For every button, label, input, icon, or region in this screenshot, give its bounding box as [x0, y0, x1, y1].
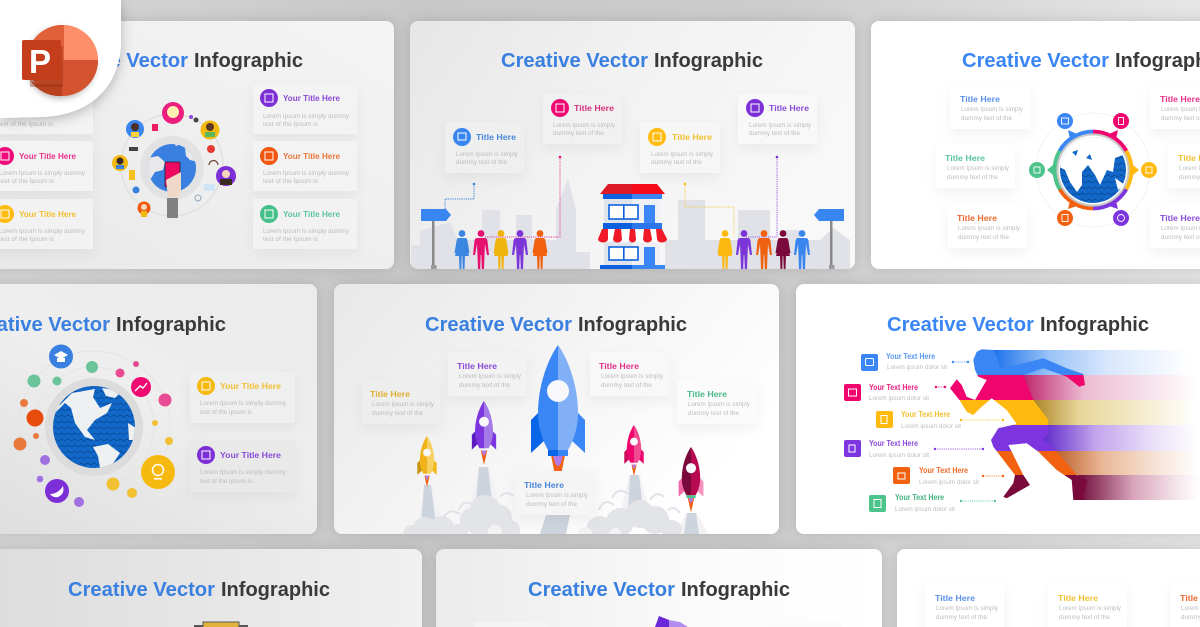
panel: bottom middle infographic — [436, 549, 882, 627]
dotted connectors — [445, 156, 778, 237]
card: purple: dummy text of the — [749, 131, 801, 137]
panel: runner infographic — [796, 284, 1200, 534]
card: pink left — [0, 141, 93, 191]
row: green: Your Text Here — [895, 493, 944, 502]
people group right — [718, 230, 810, 269]
card: green right — [253, 199, 357, 249]
title — [528, 579, 790, 601]
card: yellow: Lorem Ipsum is simply — [1059, 606, 1121, 612]
rocket: pink — [624, 425, 644, 476]
card: blue: dummy text of the — [456, 160, 508, 166]
title — [68, 579, 330, 601]
icon: PowerPoint logo: P — [29, 43, 51, 80]
card: orange right: Your Title Here — [283, 152, 341, 161]
row: orange — [893, 466, 1004, 486]
card: purple — [1150, 204, 1200, 248]
card: left stub — [474, 622, 550, 627]
card: pink: Lorem Ipsum is simply — [601, 374, 663, 380]
card: purple — [190, 441, 295, 492]
card: purple: Lorem Ipsum is simply dummy — [200, 470, 286, 476]
speed bands — [985, 350, 1200, 500]
panel: earth orbit infographic — [0, 284, 317, 534]
title — [887, 314, 1149, 336]
card: pink — [543, 94, 622, 144]
card: blue: Title Here — [476, 133, 517, 142]
card: orange — [1171, 583, 1200, 627]
card: right stub — [763, 622, 842, 627]
card: purple: text of the Ipsum is — [200, 479, 252, 485]
title: Infographic — [1040, 314, 1149, 336]
title: Infographic — [681, 579, 790, 601]
row: orange: Your Text Here — [919, 466, 968, 475]
card: yellow: dummy text of the — [1059, 615, 1111, 621]
card: pink: Title Here — [1160, 95, 1200, 104]
card: blue — [950, 85, 1030, 129]
card: purple: Title Here — [1160, 214, 1200, 223]
card: orange: Title Here — [957, 214, 998, 223]
row: blue — [861, 352, 969, 371]
card: purple: Title Here — [457, 362, 498, 371]
card: blue — [516, 471, 595, 515]
card: blue: dummy text of the — [961, 116, 1013, 122]
card: blue: Title Here — [960, 95, 1001, 104]
title: Creative Vector — [425, 314, 572, 336]
row: blue: Lorem ipsum dolor sit — [887, 365, 947, 371]
card: yellow — [640, 122, 720, 173]
title — [0, 314, 226, 336]
title: Infographic — [654, 50, 763, 72]
card: pink: Lorem Ipsum is simply — [553, 123, 615, 129]
card: blue — [445, 122, 524, 173]
title — [501, 50, 763, 72]
smoke clouds and exhaust trails — [403, 467, 708, 534]
card: top left — [0, 84, 93, 134]
rocket: purple — [472, 401, 496, 465]
card: yellow: dummy text of the — [651, 160, 703, 166]
panel: shop and people infographic — [410, 21, 855, 269]
row: blue: Your Text Here — [886, 352, 935, 361]
shop building — [598, 184, 667, 269]
card: blue: Lorem Ipsum is simply — [961, 107, 1023, 113]
panel: bottom right infographic — [897, 549, 1200, 627]
card: pink — [590, 352, 669, 396]
signpost left — [421, 209, 451, 269]
title — [41, 50, 303, 72]
row: yellow — [876, 410, 1004, 430]
card: yellow: Title Here — [1058, 594, 1099, 603]
card: purple: Your Title Here — [220, 451, 282, 460]
card: pink: dummy text of the — [553, 131, 605, 137]
card: purple right — [253, 84, 357, 134]
row: purple: Your Text Here — [869, 439, 918, 448]
card: pink: Title Here — [599, 362, 640, 371]
title: Infographic — [116, 314, 226, 336]
card: blue: Lorem Ipsum is simply — [526, 493, 588, 499]
card: blue: Lorem Ipsum is simply — [456, 152, 518, 158]
title: Creative Vector — [41, 50, 188, 72]
row: green: Lorem ipsum dolor sit — [895, 507, 955, 513]
card: green — [936, 144, 1015, 188]
card: yellow — [190, 372, 295, 423]
card: orange right: Lorem Ipsum is simply dummy — [263, 171, 349, 177]
card: orange: dummy text of the — [958, 235, 1010, 241]
title: Creative Vector — [501, 50, 648, 72]
card: purple: Title Here — [769, 104, 810, 113]
city skyline — [411, 178, 850, 269]
card: yellow — [1048, 583, 1127, 627]
row: pink — [844, 383, 946, 402]
running figure — [950, 349, 1088, 500]
card: blue: Title Here — [935, 594, 976, 603]
card: purple right: Your Title Here — [283, 94, 341, 103]
card: purple — [738, 94, 817, 144]
card: yellow: Title Here — [672, 133, 713, 142]
row: pink: Your Text Here — [869, 383, 918, 392]
card: yellow left: text of the Ipsum is — [0, 237, 54, 243]
row: yellow: Lorem ipsum dolor sit — [901, 424, 961, 430]
card: blue: dummy text of the — [936, 615, 988, 621]
title: Creative Vector — [68, 579, 215, 601]
rocket: main blue — [531, 345, 585, 487]
card: pink: Title Here — [574, 104, 615, 113]
card: pink left: text of the Ipsum is — [0, 179, 54, 185]
card: blue: dummy text of the — [526, 502, 578, 508]
card: blue: Lorem Ipsum is simply — [936, 606, 998, 612]
row: green — [869, 493, 996, 513]
title — [962, 50, 1200, 72]
card: pink: dummy text of the — [601, 383, 653, 389]
card: yellow — [362, 380, 440, 424]
signpost right — [814, 209, 844, 269]
card: yellow: dummy text of the — [372, 411, 424, 417]
card: green right: text of the Ipsum is — [263, 237, 318, 243]
card: purple: Lorem Ipsum is simply — [459, 374, 521, 380]
card: green — [677, 380, 757, 424]
rocket: maroon — [679, 447, 703, 512]
card: purple — [448, 352, 527, 396]
card: purple right: Lorem Ipsum is simply dummy — [263, 114, 349, 120]
row: pink: Lorem ipsum dolor sit — [869, 396, 929, 402]
card: green: Title Here — [687, 390, 728, 399]
card: blue — [925, 583, 1004, 627]
card: yellow: Lorem Ipsum is simply dummy — [200, 401, 286, 407]
card: pink left: Your Title Here — [19, 152, 77, 161]
card: green right: Your Title Here — [283, 210, 341, 219]
card: orange right: text of the Ipsum is — [263, 179, 318, 185]
row: orange: Lorem ipsum dolor sit — [919, 480, 979, 486]
card: yellow — [1168, 144, 1200, 188]
title: Infographic — [194, 50, 303, 72]
card: yellow left — [0, 199, 93, 249]
card: yellow: Lorem Ipsum is simply — [651, 152, 713, 158]
PowerPoint badge — [0, 0, 121, 118]
card: green: Lorem Ipsum is simply — [947, 166, 1009, 172]
card: orange right — [253, 141, 357, 191]
card: blue: Title Here — [524, 481, 565, 490]
panel: people network infographic — [0, 21, 394, 269]
globe cycle diagram — [1029, 113, 1157, 227]
title: Infographic — [578, 314, 687, 336]
card: orange: Lorem Ipsum is simply — [958, 226, 1020, 232]
card: yellow: Lorem Ipsum is simply — [372, 402, 434, 408]
card: purple: dummy text of the — [459, 383, 511, 389]
globe with phone and avatars — [112, 102, 236, 218]
card: orange — [948, 204, 1027, 248]
title: Infographic — [221, 579, 330, 601]
icon: purple shape top — [655, 616, 688, 627]
card: yellow left: Your Title Here — [19, 210, 77, 219]
panel: bottom left infographic — [0, 549, 422, 627]
card: yellow: text of the Ipsum is — [200, 410, 252, 416]
icon: yellow trophy top — [194, 622, 248, 627]
panel: globe cycle infographic — [871, 21, 1200, 269]
title: Creative Vector — [887, 314, 1034, 336]
card: green: dummy text of the — [688, 411, 740, 417]
card: pink — [1150, 85, 1200, 129]
card: yellow: Title Here — [370, 390, 411, 399]
panel: rockets infographic — [334, 284, 779, 544]
earth with orbit dots — [14, 344, 175, 507]
card: green: Title Here — [945, 154, 986, 163]
title: Creative Vector — [962, 50, 1109, 72]
title — [425, 314, 687, 336]
row: purple — [844, 439, 984, 459]
card: yellow left: Lorem Ipsum is simply dummy — [0, 229, 85, 235]
rocket: yellow — [417, 436, 437, 487]
card: green: Lorem Ipsum is simply — [688, 402, 750, 408]
title: Creative Vector — [528, 579, 675, 601]
card: purple right: text of the Ipsum is — [263, 122, 318, 128]
people group left — [454, 230, 548, 269]
row: purple: Lorem ipsum dolor sit — [869, 453, 929, 459]
card: yellow: Your Title Here — [220, 382, 282, 391]
card: pink left: Lorem Ipsum is simply dummy — [0, 171, 85, 177]
card: green: dummy text of the — [947, 175, 999, 181]
row: yellow: Your Text Here — [901, 410, 950, 419]
card: green right: Lorem Ipsum is simply dummy — [263, 229, 349, 235]
card: purple: Lorem Ipsum is simply — [749, 123, 811, 129]
